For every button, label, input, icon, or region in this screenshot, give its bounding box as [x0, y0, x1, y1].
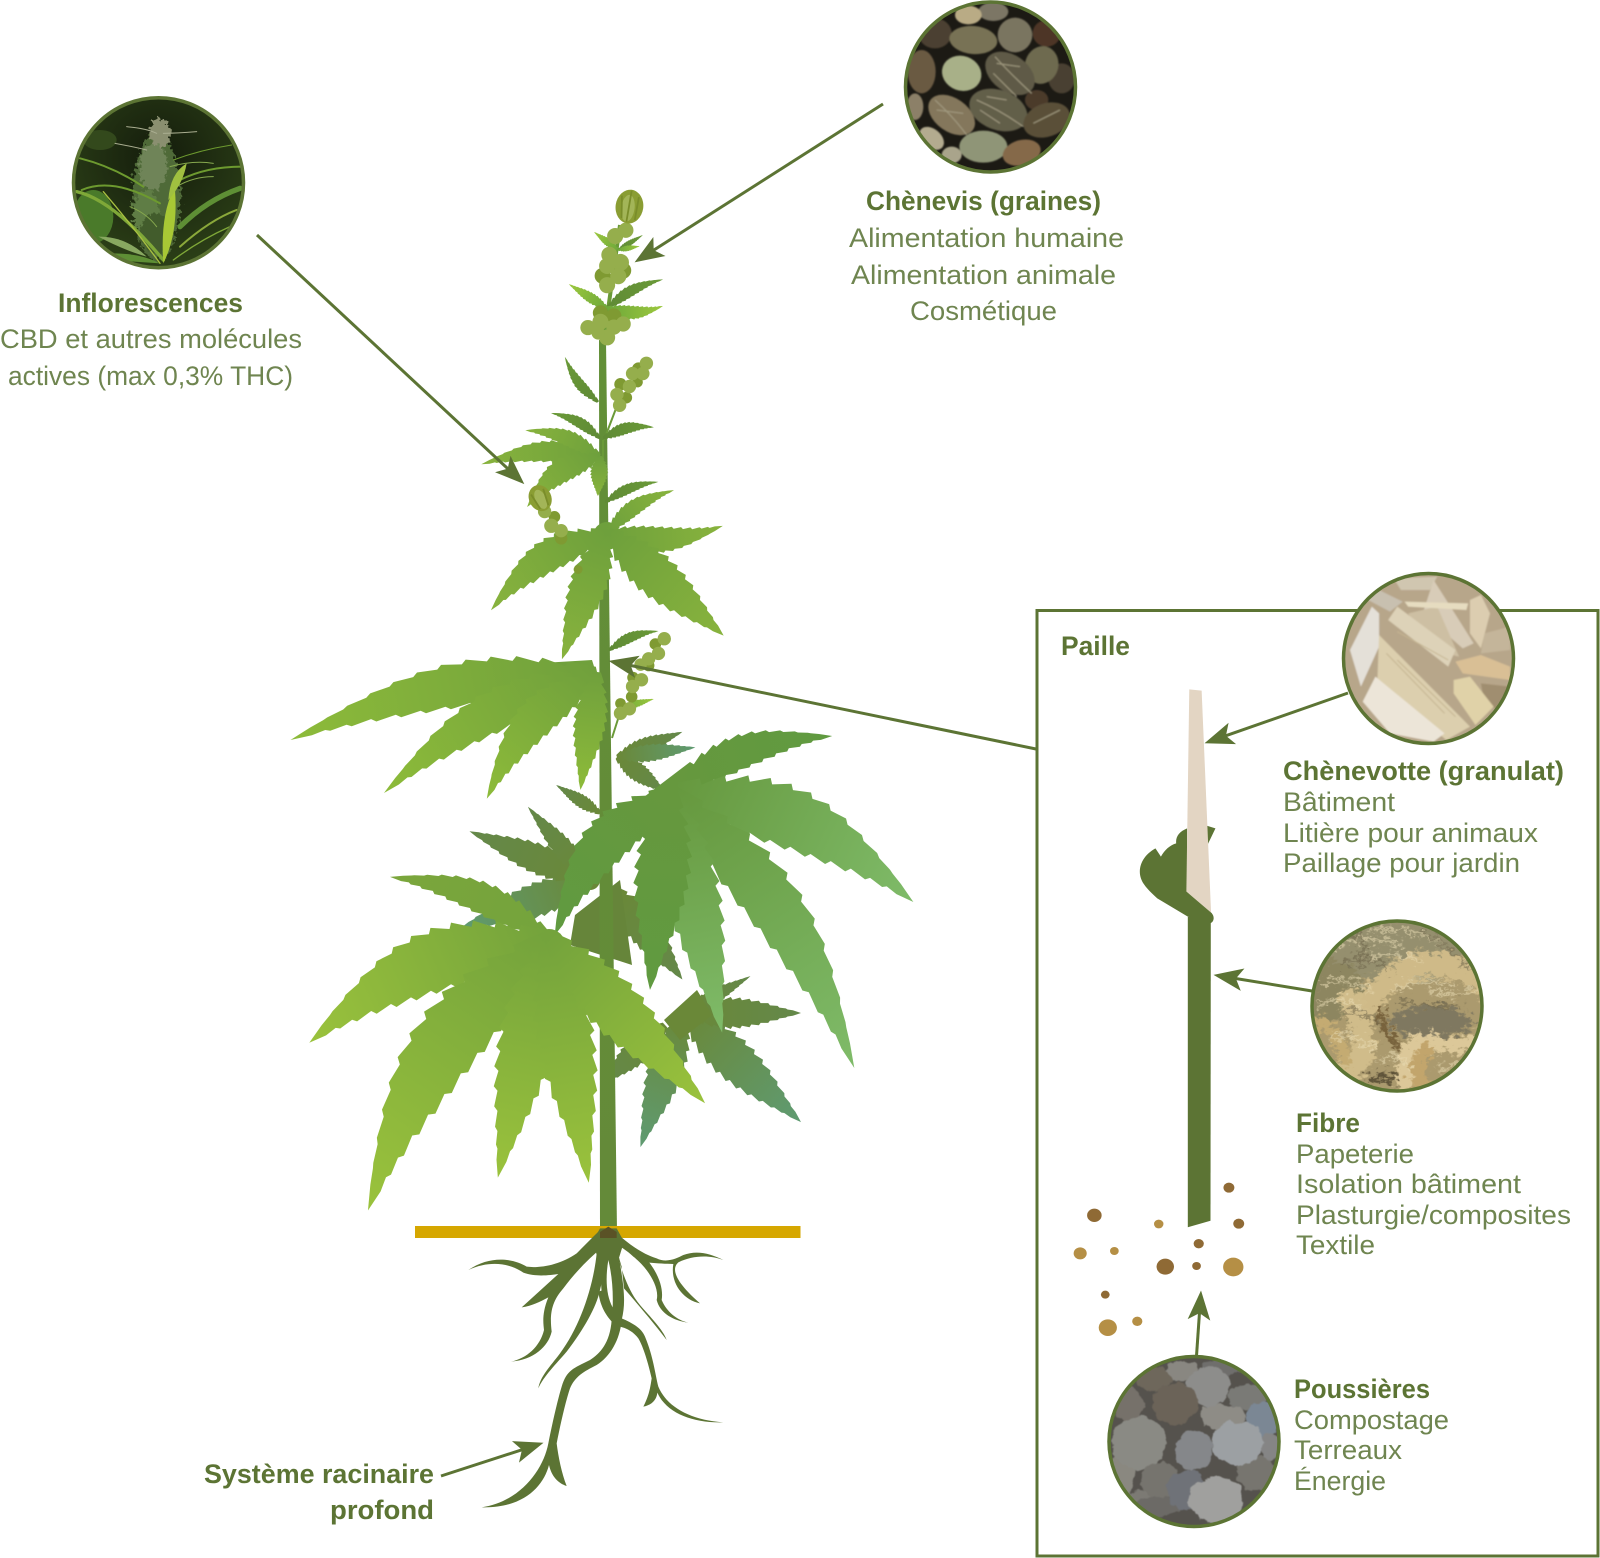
ground line — [415, 1226, 800, 1238]
text: poussières: Poussières — [1294, 1374, 1430, 1404]
text: chènevotte: Litière pour animaux — [1283, 818, 1539, 848]
arrow: fibre — [1218, 976, 1312, 991]
plant: main stem — [599, 225, 624, 1232]
text: poussières: Terreaux — [1294, 1435, 1403, 1465]
plant: upper right large leaf — [521, 706, 937, 1074]
dust particles — [1074, 1183, 1244, 1336]
text: poussières: Énergie — [1294, 1466, 1386, 1496]
arrow: paille to stem — [613, 662, 1036, 749]
arrow: poussières — [1196, 1295, 1201, 1356]
text: fibre: Plasturgie/composites — [1296, 1200, 1571, 1230]
text: poussières — [1294, 1374, 1449, 1496]
text: système racinaire — [204, 1459, 434, 1525]
text: chènevotte: Bâtiment — [1283, 787, 1396, 817]
root system — [468, 1227, 723, 1507]
text: paille heading: Paille — [1061, 631, 1130, 661]
photo: dust pellets — [1108, 1356, 1280, 1528]
photo: hemp seeds — [904, 1, 1076, 173]
text: chènevis — [849, 186, 1124, 326]
text: inflorescences — [0, 288, 302, 391]
text: inflorescences: actives (max 0,3% THC) — [8, 361, 293, 391]
text: fibre — [1296, 1108, 1571, 1260]
photo: inflorescence — [72, 97, 244, 269]
plant: lower left large leaf — [286, 849, 726, 1218]
arrow: chènevotte — [1209, 693, 1348, 742]
text: inflorescences: CBD et autres molécules — [0, 324, 302, 354]
panel: paille frame — [1037, 610, 1598, 1556]
plant: small upper leaf — [480, 416, 609, 511]
text: fibre: Textile — [1296, 1230, 1375, 1260]
stem cross-section: fibre shaft — [1188, 917, 1211, 1227]
plant: back dark leaves — [454, 723, 816, 1153]
arrow: root system — [441, 1444, 539, 1476]
text: chènevotte — [1283, 756, 1564, 878]
text: système racinaire: profond — [330, 1495, 434, 1525]
text: inflorescences: Inflorescences — [58, 288, 243, 318]
text: fibre: Fibre — [1296, 1108, 1360, 1138]
arrow: to seeds — [638, 104, 883, 260]
text: chènevis: Alimentation animale — [851, 260, 1116, 290]
text: chènevis: Chènevis (graines) — [866, 186, 1101, 216]
text: fibre: Isolation bâtiment — [1296, 1169, 1522, 1199]
text: chènevis: Cosmétique — [910, 296, 1057, 326]
plant: upper left large leaf — [282, 632, 614, 804]
text: chènevotte: Chènevotte (granulat) — [1283, 756, 1564, 786]
text: fibre: Papeterie — [1296, 1139, 1414, 1169]
arrow: to inflorescences — [257, 235, 521, 481]
text: chènevis: Alimentation humaine — [849, 223, 1124, 253]
text: chènevotte: Paillage pour jardin — [1283, 848, 1520, 878]
plant: seed clusters and buds — [524, 188, 671, 720]
plant: middle leaf — [474, 478, 739, 666]
plant: upper small leaves — [550, 229, 664, 712]
text: poussières: Compostage — [1294, 1405, 1449, 1435]
photo: hemp fibre — [1310, 919, 1484, 1093]
stem cross-section: chènevotte and knot — [1140, 689, 1215, 923]
text: système racinaire: Système racinaire — [204, 1459, 434, 1489]
photo: chènevotte chips — [1342, 572, 1514, 744]
